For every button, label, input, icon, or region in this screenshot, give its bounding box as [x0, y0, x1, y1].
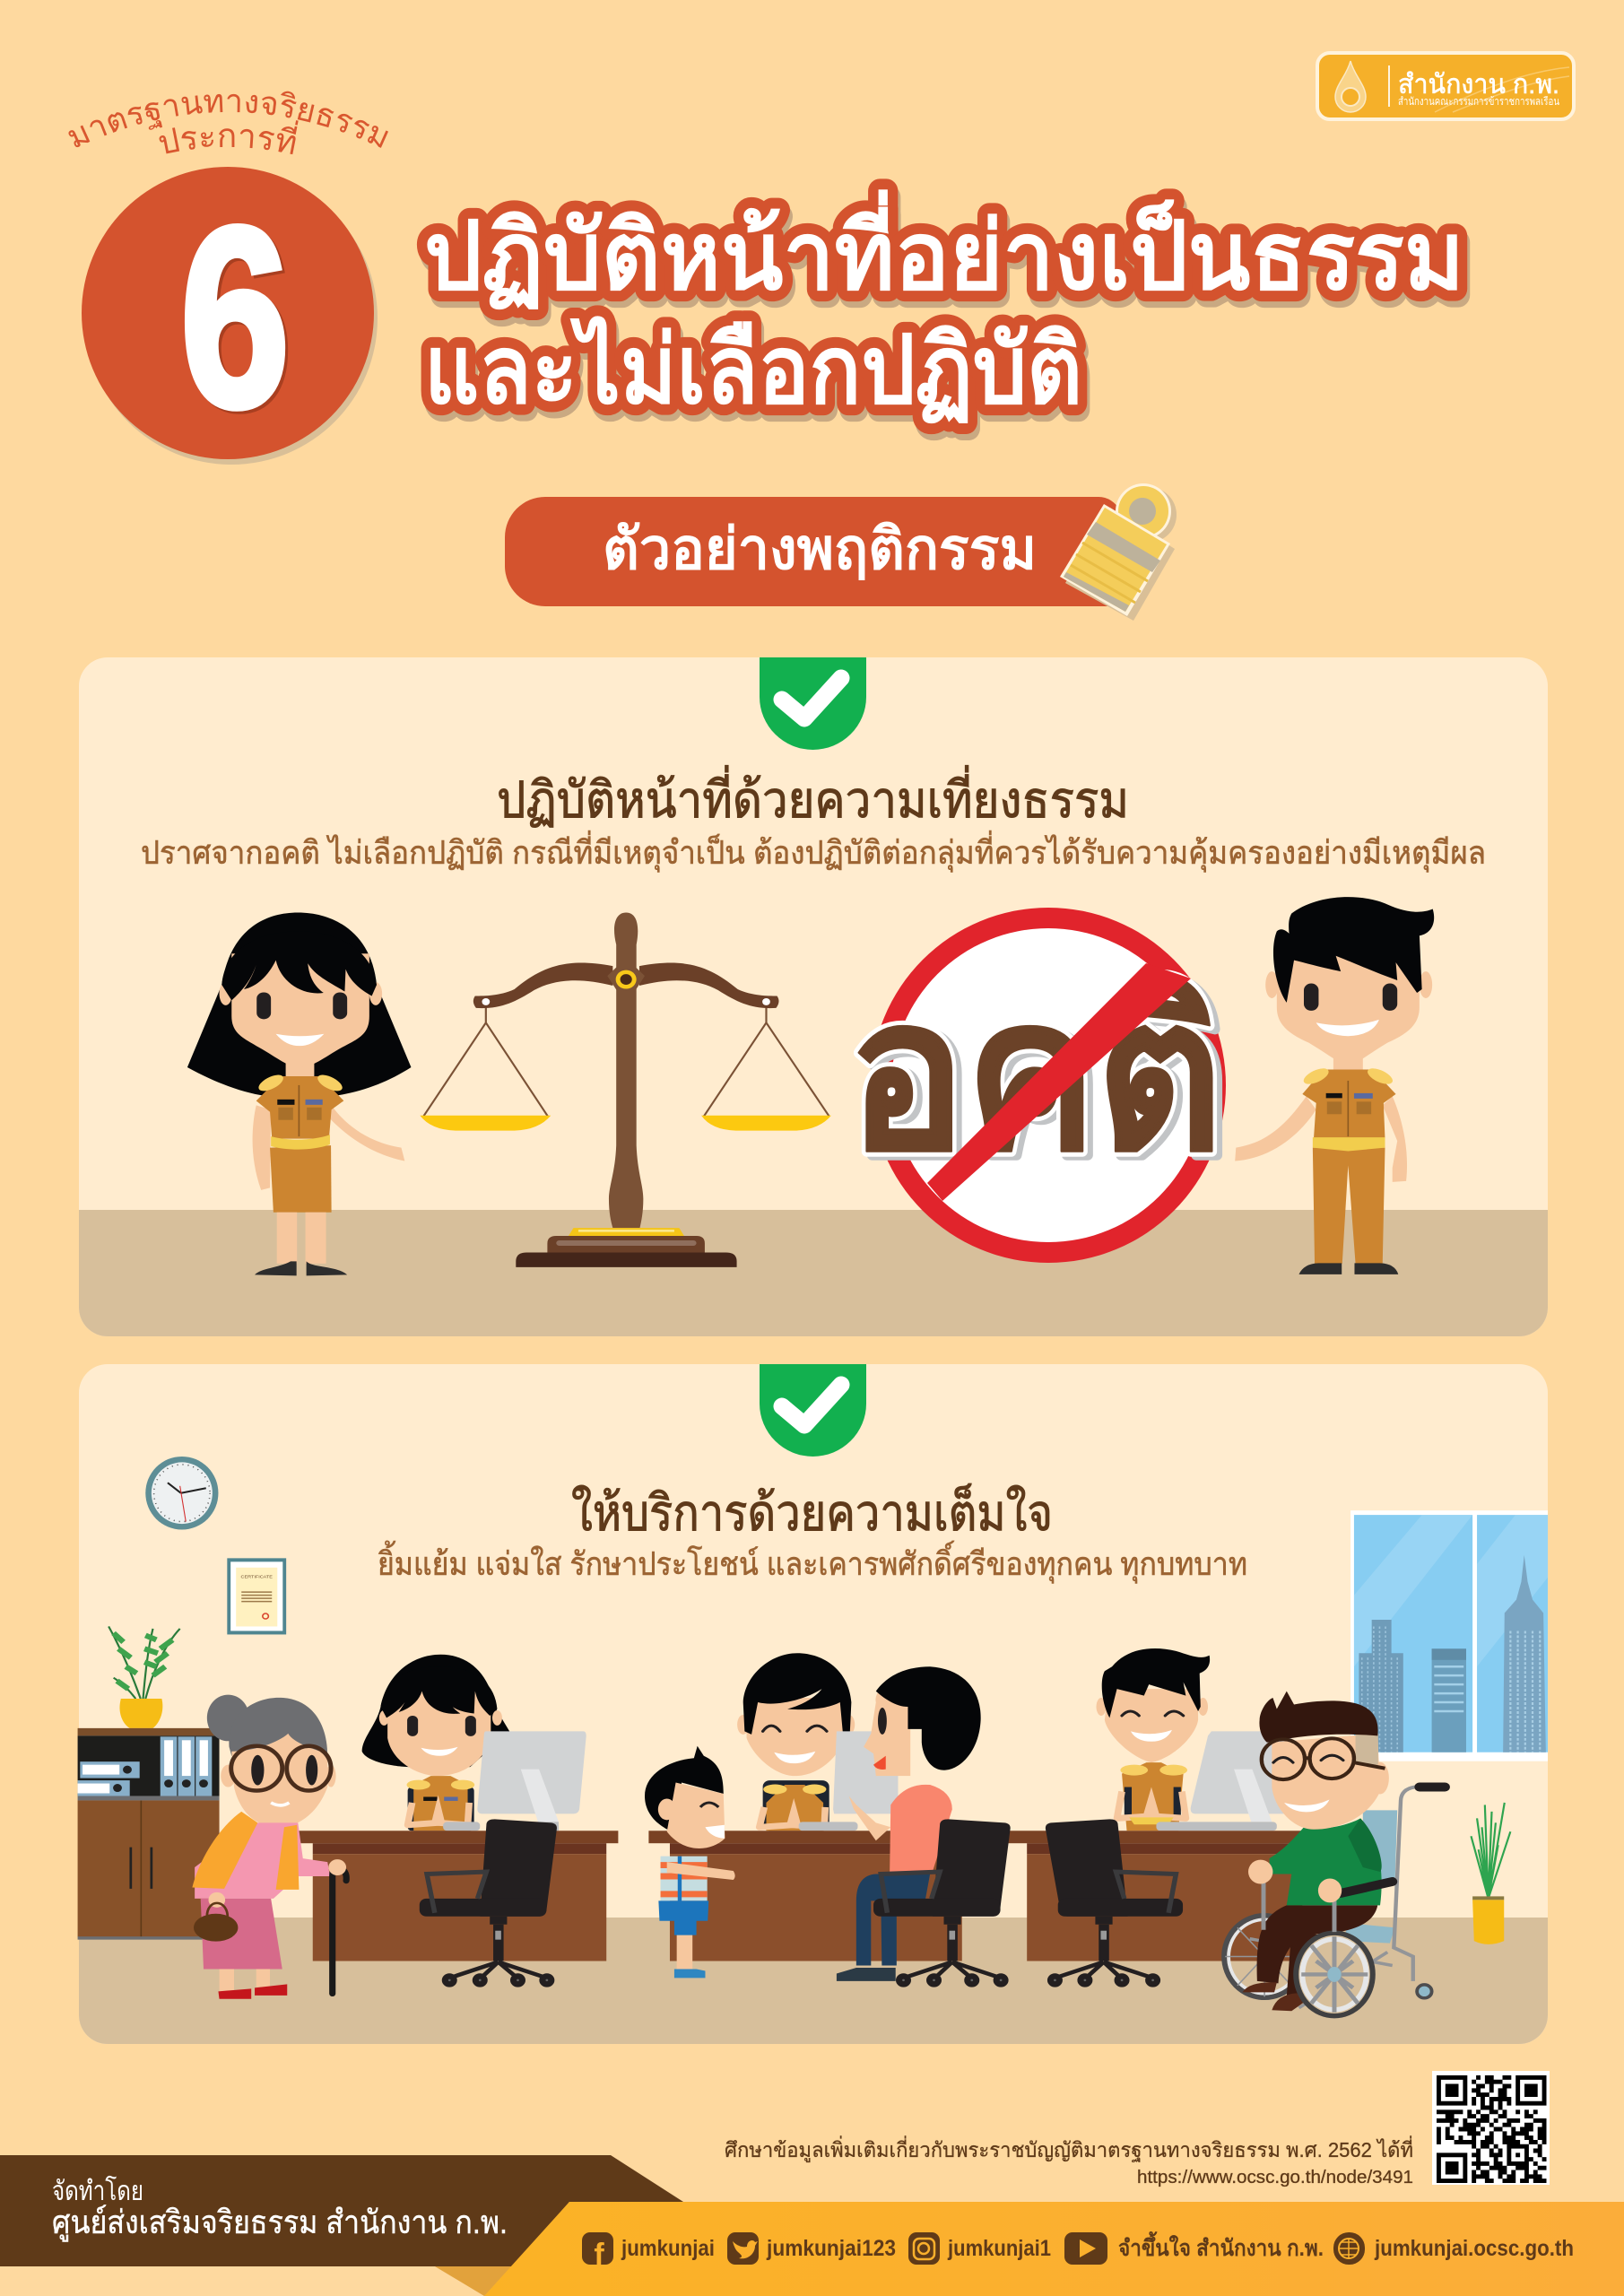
title: ปฏิบัติหน้าที่อย่างเป็นธรรม: [427, 196, 1467, 317]
icon: certificate: CERTIFICATE: [241, 1575, 273, 1580]
office desks: [298, 1831, 1306, 1961]
figure: customer: [837, 1666, 981, 1981]
panel: service: [78, 1364, 1548, 2044]
title: ปฏิบัติหน้าที่อย่างเป็นธรรม: [424, 189, 1464, 310]
handle: twitter: jumkunjai123: [766, 2236, 896, 2261]
number badge 6: [82, 167, 378, 465]
office chairs: [420, 1819, 557, 1984]
section banner: behaviour examples: ตัวอย่างพฤติกรรม: [603, 517, 1037, 581]
icon: office cabinet: [78, 1728, 220, 1940]
figure: seated officers behind monitors: [362, 1653, 855, 1831]
heading: ให้บริการด้วยความเต็มใจ: [571, 1483, 1053, 1541]
logo: OCSC: [1317, 53, 1574, 119]
arc heading: ethical standard: มาตรฐานทางจริยธรรม: [68, 91, 388, 148]
footer: url: https://www.ocsc.go.th/node/3491: [1137, 2168, 1413, 2187]
prohibition slash: [927, 963, 1191, 1201]
footer: organiser band: [0, 2155, 683, 2266]
handle: youtube: จำขึ้นใจ สำนักงาน ก.พ.: [1118, 2231, 1324, 2261]
description: ปราศจากอคติ ไม่เลือกปฏิบัติ กรณีที่มีเหตุจำเป็น ต้องปฏิบัติต่อกลุ่มที่ควรได้รับความคุ้มครองอย่างมีเหตุมีผล: [141, 831, 1486, 873]
figure: grandmother with cane: [192, 1695, 346, 1999]
footer: information line: ศึกษาข้อมูลเพิ่มเติมเกี่ยวกับพระราชบัญญัติมาตรฐานทางจริยธรรม พ.ศ. 2562 ได้ที่: [725, 2135, 1413, 2162]
figure: seated officer right: [1097, 1648, 1210, 1831]
section banner: behaviour examples: [505, 497, 1121, 606]
icon: scales of justice: [420, 912, 831, 1267]
QR code: [1432, 2071, 1550, 2185]
word: bias: อคติ: [848, 957, 1223, 1194]
icon: check badge: [760, 657, 866, 750]
footer: organiser band: ศูนย์ส่งเสริมจริยธรรม สำนักงาน ก.พ.: [52, 2204, 508, 2242]
handle: instagram: jumkunjai1: [947, 2236, 1051, 2261]
icon: window with city view: [1350, 1510, 1548, 1761]
word: bias: อคติ: [854, 961, 1229, 1197]
icon: check badge: [760, 1364, 866, 1457]
heading: ปฏิบัติหน้าที่ด้วยความเที่ยงธรรม: [497, 765, 1129, 828]
footer: shadow wedge: [435, 2266, 516, 2296]
figure: child: [645, 1746, 735, 1978]
icon: facebook: f: [594, 2238, 604, 2272]
icon: instagram: [908, 2232, 940, 2265]
icon: website: [1333, 2232, 1365, 2265]
icon: certificate: [227, 1558, 286, 1634]
icon: youtube: [1064, 2232, 1107, 2265]
title: ปฏิบัติหน้าที่อย่างเป็นธรรม: [424, 189, 1464, 310]
panel: fair duty: [79, 657, 1548, 1336]
footer: organiser band: จัดทำโดย: [52, 2175, 143, 2206]
arc heading: number: ประการที่: [160, 120, 299, 154]
title: [424, 189, 1467, 430]
title: และไม่เลือกปฏิบัติ: [424, 316, 1082, 424]
icon: epaulette: [1060, 483, 1177, 621]
chair 1: [420, 1819, 557, 1984]
office chairs: centre and right: [873, 1819, 1183, 1984]
icon: computer monitors: [443, 1731, 1291, 1831]
number badge 6: 6: [183, 178, 292, 463]
number badge 6: 6: [180, 175, 290, 460]
icon: twitter: [727, 2232, 759, 2265]
footer: social band: [484, 2202, 1624, 2296]
figure: female officer: [187, 912, 411, 1275]
handle: facebook: jumkunjai: [621, 2236, 715, 2261]
icon: facebook: [582, 2232, 613, 2272]
handle: website: jumkunjai.ocsc.go.th: [1374, 2236, 1574, 2261]
icon: floor plant: [1471, 1803, 1510, 1944]
figure: male officer: [1235, 897, 1434, 1274]
logo: OCSC: สำนักงาน ก.พ.: [1398, 70, 1559, 100]
title: และไม่เลือกปฏิบัติ: [427, 322, 1085, 430]
icon: prohibition sign: [871, 908, 1226, 1263]
icon: wall clock: [145, 1457, 218, 1530]
officer: woman: [362, 1655, 509, 1831]
officer: man: [737, 1653, 855, 1831]
icon: plant on cabinet: [109, 1626, 180, 1728]
word: bias: อคติ: [848, 957, 1223, 1194]
logo: OCSC: สำนักงานคณะกรรมการข้าราชการพลเรือน: [1398, 95, 1559, 108]
description: ยิ้มแย้ม แจ่มใส รักษาประโยชน์ และเคารพศักดิ์ศรีของทุกคน ทุกบทบาท: [378, 1540, 1247, 1584]
figure: man in wheelchair: [1224, 1692, 1450, 2016]
title: และไม่เลือกปฏิบัติ: [424, 316, 1082, 424]
